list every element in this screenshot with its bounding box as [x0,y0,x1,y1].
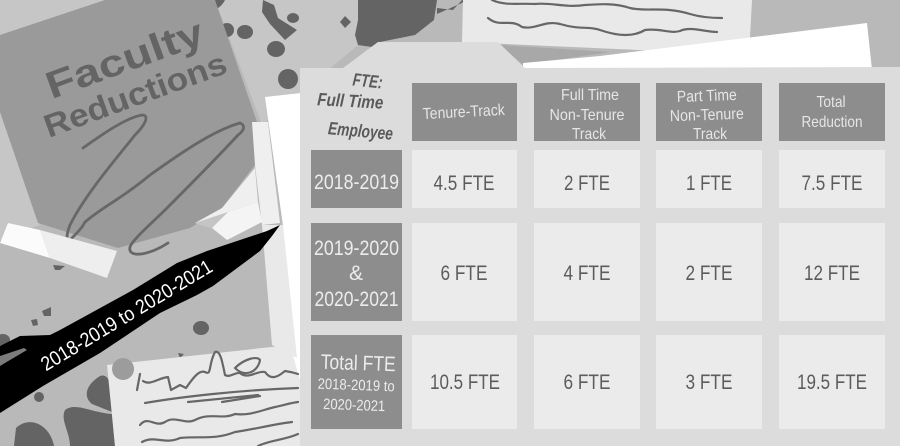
column header: Total Reduction [779,83,885,141]
panel: folder table [300,42,900,446]
panel: faculty reductions note [0,0,257,254]
row label: 2019-2020 & 2020-2021: 2019-2020 [314,237,399,260]
FTE definition: FTE: [352,70,384,93]
row label: Total FTE: 2020-2021 [323,396,385,415]
row 1 values: 1 FTE [686,172,732,195]
pin [112,358,134,380]
tape left [0,223,117,278]
column header: Full Time Non-Tenure Track: Track [572,126,607,143]
title: Faculty Reductions: Reductions [39,45,232,144]
row 1 values [412,150,885,208]
column header: Tenure-Track: Tenure-Track [422,102,506,123]
paper: light strip [252,122,280,225]
title: Faculty Reductions: Faculty [40,12,210,108]
row 2 values: 2 FTE [686,262,732,285]
row 3 values: 3 FTE [686,371,732,394]
column header: Part Time Non-Tenure Track [656,83,762,143]
column header: Full Time Non-Tenure Track: Full Time [561,87,619,104]
column header: Full Time Non-Tenure Track [534,83,640,143]
scribble [67,115,244,254]
sticky note [107,345,300,446]
tape right [195,202,262,240]
row 2 values: 12 FTE [804,262,860,285]
column header: Part Time Non-Tenure Track: Track [693,126,728,143]
row label: Total FTE [311,335,402,429]
column header: Part Time Non-Tenure Track: Non-Tenure [670,106,744,125]
row 2 values [412,223,885,321]
marker pen [0,225,280,413]
row 2 values: 4 FTE [564,262,610,285]
FTE definition: Employee [327,118,394,144]
FTE definition [317,70,394,144]
title: Faculty Reductions [39,12,232,144]
row label: 2019-2020 & 2020-2021: & [349,262,363,285]
paper: white sheet behind folder [523,23,872,70]
row label: 2018-2019 [311,150,402,208]
row 3 values: 6 FTE [564,371,610,394]
row label: Total FTE: Total FTE [320,351,396,376]
row label: 2019-2020 & 2020-2021 [311,223,402,321]
column header: Total Reduction: Total [816,94,846,111]
row 3 values: 19.5 FTE [797,371,867,394]
row label: Total FTE: 2018-2019 to [317,376,395,395]
column header: Full Time Non-Tenure Track: Non-Tenure [550,107,625,124]
row 1 values: 2 FTE [564,172,610,195]
column header: Tenure-Track [412,83,517,141]
FTE definition: Full Time [317,89,384,113]
row 3 values: 10.5 FTE [430,371,500,394]
row 2 values: 6 FTE [440,262,488,285]
column header: Part Time Non-Tenure Track: Part Time [677,87,737,106]
paper: white sheet left of folder [265,92,310,446]
row label: 2018-2019: 2018-2019 [314,171,399,194]
column header: Total Reduction: Reduction [802,114,862,131]
row 1 values: 4.5 FTE [434,172,494,195]
row label: 2019-2020 & 2020-2021: 2020-2021 [314,288,398,311]
row 1 values: 7.5 FTE [802,172,862,195]
ink splatters [0,0,464,446]
marker label: 2018-2019 to 2020-2021 [37,256,217,376]
row 3 values [412,335,885,429]
paper: top note [462,0,752,55]
